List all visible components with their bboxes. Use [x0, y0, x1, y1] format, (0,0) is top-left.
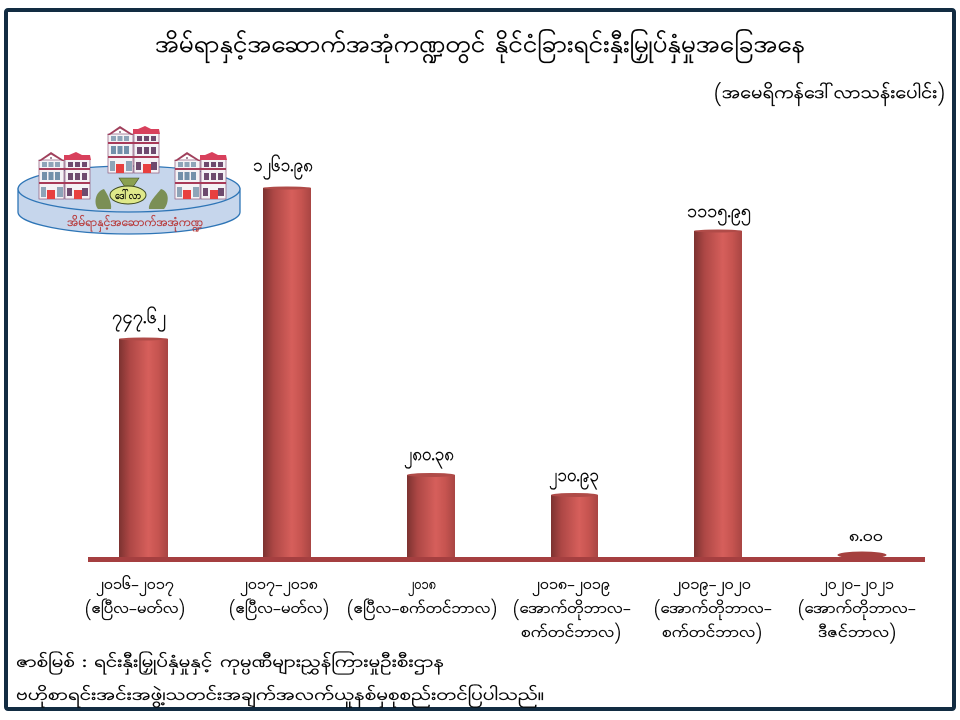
category 5: (အောက်တိုဘာလ- — [654, 598, 772, 621]
category 6: ၂၀၂၀-၂၀၂၁ — [820, 574, 894, 597]
category 1 — [85, 574, 185, 621]
bar 2016-2017 — [119, 338, 168, 558]
value labels: ၁၂၆၁.၉၈ — [253, 153, 313, 181]
source note: ဗဟိုစာရင်းအင်းအဖွဲ့၊သတင်းအချက်အလက်ယူနစ်မှစုစည်းတင်ပြပါသည်။ — [16, 683, 544, 709]
category 6 — [798, 574, 916, 645]
category 4: (အောက်တိုဘာလ- — [513, 598, 631, 621]
bar 2019-2020 — [694, 230, 742, 558]
unit note: (အမေရိကန်ဒေါ်လာသန်းပေါင်း) — [714, 80, 945, 107]
bar 2017-2018 — [263, 186, 311, 558]
value labels: ၂၁၀.၉၃ — [549, 463, 599, 491]
illustration: real estate platform — [18, 126, 240, 234]
category 6: (အောက်တိုဘာလ- — [798, 598, 916, 621]
illustration: real estate platform: အိမ်ရာနှင့်အဆောက်အအုံကဏ္ဍ — [67, 214, 203, 232]
category 5: ၂၀၁၉-၂၀၂၀ — [673, 574, 751, 597]
axis line — [88, 557, 925, 562]
category 4: စက်တင်ဘာလ) — [521, 622, 621, 645]
bar 2018-2019 — [551, 493, 598, 558]
illustration: real estate platform: ဒေါ်လာ — [115, 189, 141, 205]
value labels: ၂၈၀.၃၈ — [404, 442, 454, 470]
category 6: ဒီဇင်ဘာလ) — [818, 622, 896, 645]
value labels: ၈.၀၀ — [849, 525, 883, 549]
bar chart — [88, 186, 925, 562]
category labels — [85, 574, 916, 645]
category 2: (ဧပြီလ-မတ်လ) — [229, 598, 329, 621]
category 1: ၂၀၁၆-၂၀၁၇ — [96, 574, 174, 597]
source note: ဇာစ်မြစ် : ရင်းနှီးမြှုပ်နှံမှုနှင့် ကုမ္ပဏီများညွှန်ကြားမှုဦးစီးဌာန — [16, 650, 444, 676]
category 5: စက်တင်ဘာလ) — [662, 622, 762, 645]
value labels: ၇၄၇.၆၂ — [112, 305, 166, 333]
bar 2020-2021 — [838, 552, 886, 558]
category 3 — [347, 574, 497, 621]
bar 2018 — [407, 473, 455, 558]
value labels: ၁၁၁၅.၉၅ — [687, 199, 751, 227]
category 4 — [513, 574, 631, 645]
category 5 — [654, 574, 772, 645]
category 2: ၂၀၁၇-၂၀၁၈ — [240, 574, 318, 597]
category 3: ၂၀၁၈ — [408, 574, 436, 597]
category 3: (ဧပြီလ-စက်တင်ဘာလ) — [347, 598, 497, 621]
value labels — [112, 153, 883, 549]
title: အိမ်ရာနှင့်အဆောက်အအုံကဏ္ဍတွင် နိုင်ငံခြားရင်းနှီးမြှုပ်နှံမှုအခြေအနေ — [155, 28, 805, 64]
category 1: (ဧပြီလ-မတ်လ) — [85, 598, 185, 621]
category 2 — [229, 574, 329, 621]
category 4: ၂၀၁၈-၂၀၁၉ — [532, 574, 610, 597]
source note — [16, 650, 544, 709]
